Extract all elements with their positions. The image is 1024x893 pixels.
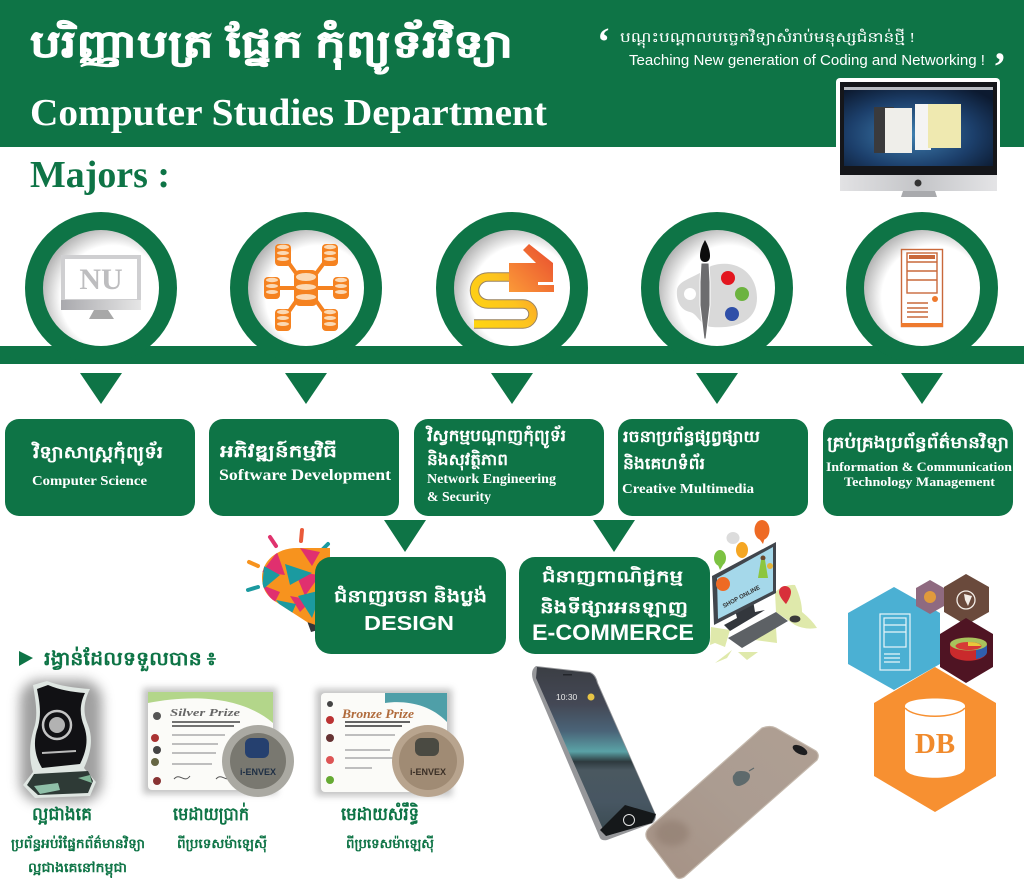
- hexagon: orange database: DB: [915, 728, 955, 760]
- award: silver prize certificate and medal: Silver Prize: [170, 708, 241, 719]
- title: Computer Studies Department: Computer Studies Department: [30, 92, 547, 134]
- panel: e-commerce: [519, 557, 710, 654]
- caption: best award: ល្អជាងគេនៅកម្ពុជា: [28, 860, 127, 878]
- location pin: [779, 586, 791, 604]
- icon: desktop computer: [836, 78, 1000, 197]
- heading: Majors: Majors :: [30, 154, 170, 196]
- panel: creative multimedia: និងគេហទំព័រ: [623, 453, 705, 473]
- panel: computer science: [5, 419, 195, 516]
- mouse: [790, 616, 800, 622]
- image: smartphone front: [532, 666, 656, 840]
- panel: computer science: វិទ្យាសាស្ត្រកុំព្យូទ័រ: [31, 441, 163, 466]
- image: smartphone front: 10:30: [556, 692, 578, 702]
- awards heading text: រង្វាន់ដែលទទួលបាន ៖: [44, 646, 217, 672]
- icon: NU monitor: [61, 255, 141, 319]
- caption: best award: ល្អជាងគេ: [32, 804, 92, 825]
- panel: software development: [209, 419, 399, 516]
- panel: information and communication technology management: Technology Management: [844, 474, 996, 489]
- panel: network engineering: Network Engineering: [427, 471, 556, 486]
- icon: closing quote mark: ’: [993, 44, 1006, 89]
- caption: best award: [11, 804, 145, 878]
- panel: information and communication technology management: [823, 419, 1013, 516]
- award: silver prize certificate and medal: [143, 688, 294, 797]
- panel: software development: អភិវឌ្ឍន៍កម្មវិធី: [220, 440, 337, 462]
- panel: design: [315, 557, 506, 654]
- icon: bullet triangle: [19, 651, 33, 666]
- caption: bronze medal: ពីប្រទេសម៉ាឡេស៊ី: [346, 835, 435, 853]
- caption: silver medal: ពីប្រទេសម៉ាឡេស៊ី: [177, 835, 268, 853]
- caption: best award: ប្រព័ន្ធអប់រំផ្នែកព័ត៌មានវិទ្យា: [11, 835, 145, 852]
- icon: server tower: [901, 250, 943, 327]
- hexagon: purple gear: [916, 580, 944, 614]
- icon: database network: [264, 244, 349, 331]
- award: bronze prize certificate and medal: Bronze Prize: [341, 706, 414, 721]
- hexagon: brown globe: [944, 574, 989, 625]
- caption: bronze medal: [341, 802, 435, 853]
- monitor screen: SHOP ONLINE: [722, 585, 761, 610]
- image: smartphone back: [646, 726, 818, 878]
- panel: creative multimedia: រចនាប្រព័ន្ធផ្សព្វផ្សាយ: [623, 426, 760, 447]
- caption: silver medal: មេដាយប្រាក់: [173, 802, 249, 825]
- icon: opening quote mark: ‘: [597, 19, 610, 64]
- chat bubbles: [714, 520, 770, 570]
- circle: computer science icon: [25, 212, 177, 364]
- panel: creative multimedia: Creative Multimedia: [622, 482, 754, 497]
- award: bronze prize certificate and medal: i-ENVEX: [410, 767, 446, 777]
- timeline band: [0, 346, 1024, 364]
- circle: multimedia icon: [641, 212, 793, 364]
- panel: computer science: Computer Science: [32, 474, 147, 489]
- icon: online shop computer: [710, 520, 817, 663]
- hexagon: dark red pie chart: [940, 618, 993, 683]
- icon: NU monitor: NU: [79, 263, 123, 296]
- panel: e-commerce: ជំនាញពាណិជ្ជកម្ម: [542, 565, 684, 587]
- award: silver prize certificate and medal: i-ENVEX: [240, 767, 276, 777]
- panel: network engineering: វិស្វកម្មបណ្តាញកុំព្យូទ័រ: [425, 425, 566, 449]
- panel: e-commerce: E-COMMERCE: [532, 620, 694, 645]
- panel: design: DESIGN: [364, 613, 454, 635]
- circle: network icon: [436, 212, 588, 364]
- map patches: [710, 585, 817, 663]
- heading: awards received: [19, 646, 217, 672]
- motto: English: Teaching New generation of Coding and Networking !: [629, 53, 985, 69]
- caption: bronze medal: មេដាយសំរឹទ្ធិ: [341, 802, 419, 825]
- icon: geometric light bulb: [248, 530, 330, 632]
- panel: design: ជំនាញរចនា និងប្លង់: [334, 585, 487, 607]
- circle: software development icon: [230, 212, 382, 364]
- hexagon: blue server: [848, 587, 940, 690]
- caption: silver medal: [173, 802, 268, 853]
- arrows: down triangles: [80, 373, 943, 404]
- keyboard: [728, 612, 788, 648]
- panel: software development: Software Development: [219, 467, 392, 484]
- motto: Khmer: បណ្តុះបណ្តាលបច្ចេកវិទ្យាសំរាប់មនុស្សជំនាន់ថ្មី !: [620, 28, 915, 49]
- title: Khmer: បរិញ្ញាបត្រ ផ្នែក កុំព្យូទ័រវិទ្យា: [30, 19, 513, 75]
- hexagon: orange database: [874, 667, 996, 812]
- award: bronze prize certificate and medal: [316, 689, 464, 797]
- motto quote: [597, 19, 1006, 89]
- icon: network cable and plug: [474, 244, 554, 324]
- panel: network engineering: និងសុវត្ថិភាព: [427, 449, 508, 471]
- monitor stand: [724, 600, 765, 631]
- panel: creative multimedia: [618, 419, 808, 516]
- panel: network engineering: & Security: [427, 489, 491, 504]
- monitor screen: [712, 542, 776, 625]
- header band: [0, 0, 1024, 147]
- arrows: lower down triangles: [384, 520, 635, 552]
- award: crystal trophy: [20, 680, 102, 802]
- icon: palette and brush: [677, 240, 757, 339]
- circle: information management icon: [846, 212, 998, 364]
- panel: network engineering: [414, 419, 604, 516]
- panel: information and communication technology management: គ្រប់គ្រងប្រព័ន្ធព័ត៌មានវិទ្យា: [827, 432, 1009, 453]
- icon cluster: hexagons: [848, 574, 996, 812]
- panel: information and communication technology management: Information & Communication: [826, 459, 1013, 474]
- panel: e-commerce: និងទីផ្សារអនឡាញ: [540, 596, 688, 618]
